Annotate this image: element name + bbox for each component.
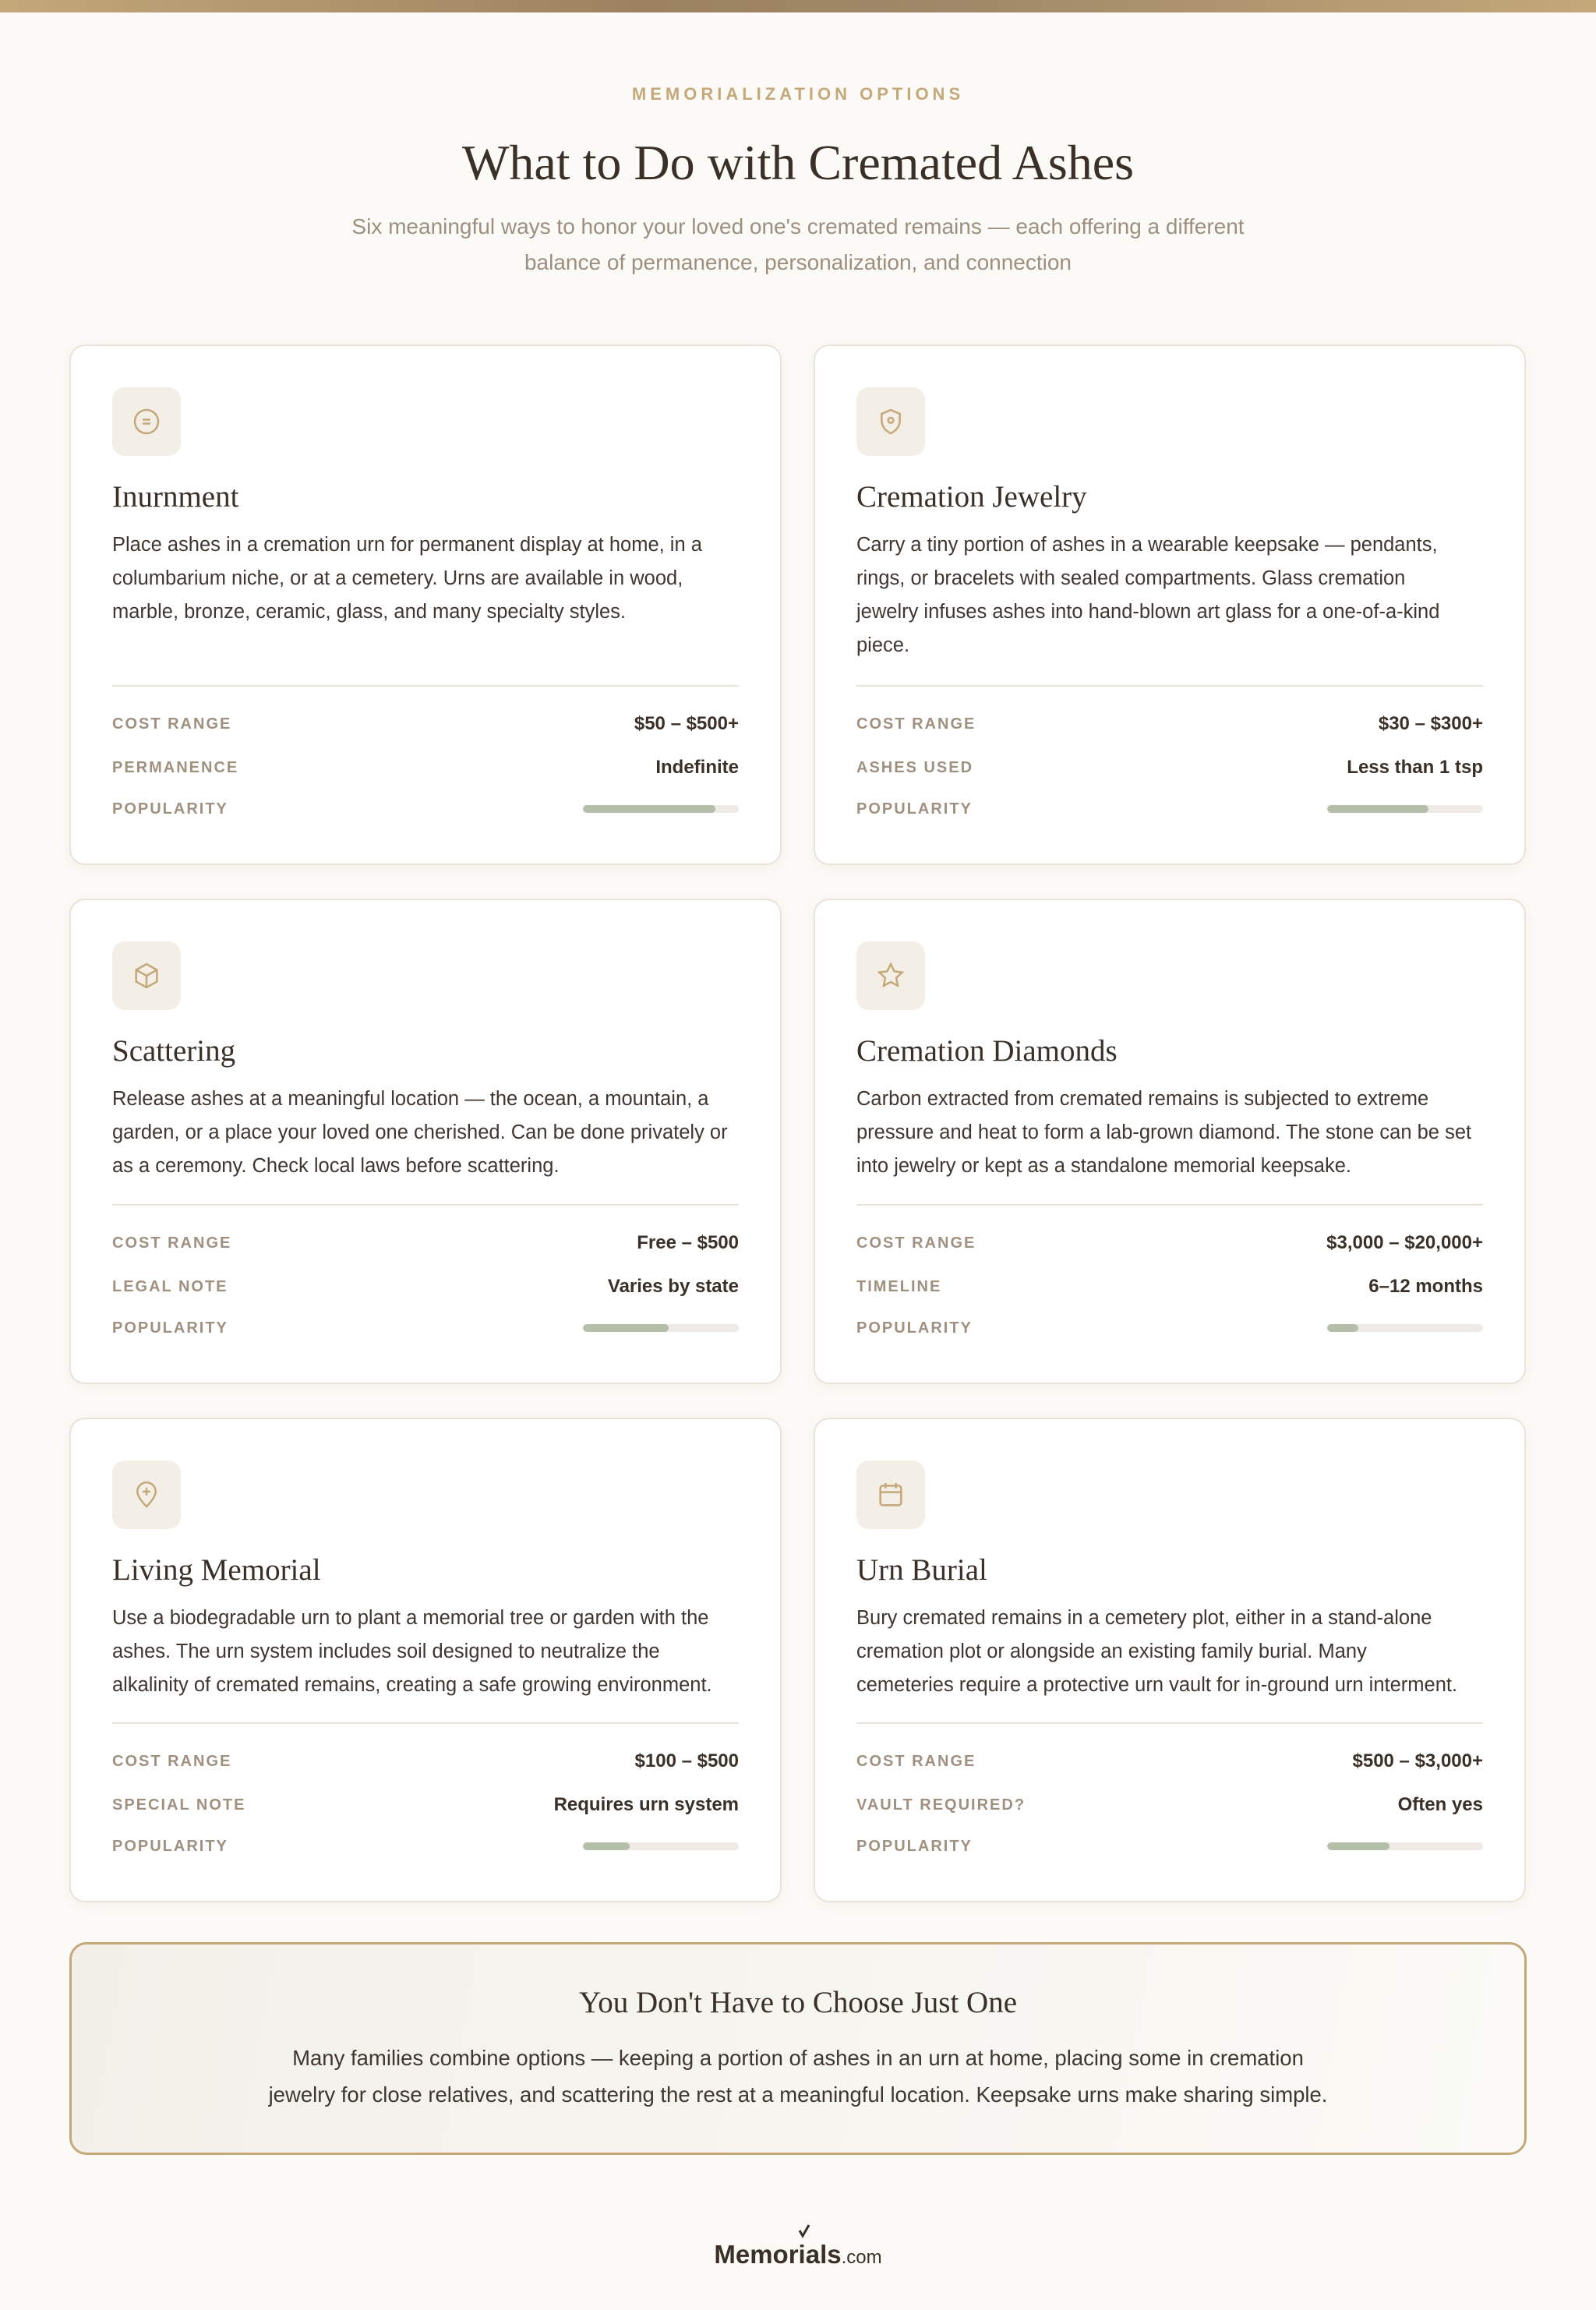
- logo: Memorials.com: [714, 2240, 882, 2269]
- stats: Often yes: [1398, 1794, 1483, 1815]
- stats: LEGAL NOTE: [112, 1278, 228, 1295]
- description: piece.: [856, 634, 909, 656]
- icon: star: [856, 941, 925, 1010]
- description: as a ceremony. Check local laws before scattering.: [112, 1155, 560, 1177]
- description: Carry a tiny portion of ashes in a wearable keepsake — pendants,: [856, 534, 1438, 556]
- heading: Urn Burial: [856, 1553, 987, 1587]
- icon: urn circle: [112, 387, 181, 456]
- description: pressure and heat to form a lab-grown diamond. The stone can be set: [856, 1121, 1471, 1143]
- description: cremation plot or alongside an existing family burial. Many: [856, 1641, 1367, 1662]
- subtitle: [351, 214, 1245, 274]
- logo: [714, 2224, 882, 2269]
- stats: [856, 685, 1483, 864]
- icon: map pin plus: [112, 1461, 181, 1529]
- panel: Urn Burial: [814, 1418, 1526, 1902]
- stats: 6–12 months: [1368, 1276, 1483, 1297]
- stats: [856, 1722, 1483, 1901]
- callout text: [268, 2046, 1327, 2107]
- description: [856, 1088, 1471, 1177]
- description: [112, 534, 702, 623]
- stats: [112, 1204, 739, 1383]
- stats: COST RANGE: [112, 1752, 231, 1769]
- description: Carbon extracted from cremated remains is subjected to extreme: [856, 1088, 1428, 1110]
- description: into jewelry or kept as a standalone memorial keepsake.: [856, 1155, 1351, 1177]
- stats: COST RANGE: [856, 1752, 976, 1769]
- description: ashes. The urn system includes soil designed to neutralize the: [112, 1641, 660, 1662]
- stats: $3,000 – $20,000+: [1326, 1232, 1483, 1253]
- description: [856, 534, 1439, 656]
- description: rings, or bracelets with sealed compartments. Glass cremation: [856, 567, 1405, 589]
- heading: Cremation Jewelry: [856, 480, 1087, 514]
- stats: POPULARITY: [112, 1838, 228, 1855]
- stats: [856, 1204, 1483, 1383]
- panel: Scattering: [69, 899, 782, 1384]
- stats: Requires urn system: [554, 1794, 739, 1815]
- stats: POPULARITY: [856, 1319, 973, 1336]
- stats: Free – $500: [637, 1232, 739, 1253]
- stats: Varies by state: [608, 1276, 739, 1297]
- description: [112, 1088, 728, 1177]
- stats: $50 – $500+: [634, 713, 739, 734]
- stats: ASHES USED: [856, 759, 973, 776]
- callout: [69, 1942, 1527, 2155]
- description: Release ashes at a meaningful location — the ocean, a mountain, a: [112, 1088, 709, 1110]
- subtitle: Six meaningful ways to honor your loved one's cremated remains — each offering a different: [351, 214, 1245, 238]
- stats: COST RANGE: [112, 1234, 231, 1252]
- stats: COST RANGE: [856, 715, 976, 733]
- description: Place ashes in a cremation urn for permanent display at home, in a: [112, 534, 702, 556]
- stats: SPECIAL NOTE: [112, 1796, 245, 1813]
- heading: Inurnment: [112, 480, 238, 514]
- stats: Indefinite: [655, 757, 739, 778]
- stats: VAULT REQUIRED?: [856, 1796, 1026, 1813]
- title: What to Do with Cremated Ashes: [462, 135, 1134, 190]
- heading: Living Memorial: [112, 1553, 321, 1587]
- description: Bury cremated remains in a cemetery plot, either in a stand-alone: [856, 1607, 1432, 1629]
- stats: POPULARITY: [856, 1838, 973, 1855]
- stats: POPULARITY: [112, 1319, 228, 1336]
- stats: $100 – $500: [635, 1750, 739, 1771]
- stats: TIMELINE: [856, 1278, 941, 1295]
- panel: Living Memorial: [69, 1418, 782, 1902]
- heading: Cremation Diamonds: [856, 1034, 1118, 1068]
- stats: COST RANGE: [856, 1234, 976, 1252]
- subtitle: balance of permanence, personalization, and connection: [524, 250, 1072, 274]
- stats: [112, 685, 739, 864]
- description: [856, 1607, 1457, 1696]
- description: [112, 1607, 712, 1696]
- description: columbarium niche, or at a cemetery. Urns are available in wood,: [112, 567, 683, 589]
- stats: $30 – $300+: [1379, 713, 1483, 734]
- description: cemeteries require a protective urn vault for in-ground urn interment.: [856, 1674, 1457, 1696]
- callout text: jewelry for close relatives, and scattering the rest at a meaningful location. Keepsake urns make sharing simple.: [269, 2082, 1327, 2107]
- panel: Inurnment: [69, 344, 782, 865]
- stats: POPULARITY: [856, 800, 973, 817]
- stats: COST RANGE: [112, 715, 231, 733]
- stats: Less than 1 tsp: [1347, 757, 1483, 778]
- panel: Cremation Jewelry: [814, 344, 1526, 865]
- description: alkalinity of cremated remains, creating a safe growing environment.: [112, 1674, 712, 1696]
- callout text: Many families combine options — keeping a portion of ashes in an urn at home, placing some in cremation: [292, 2046, 1304, 2070]
- callout heading: You Don't Have to Choose Just One: [579, 1986, 1017, 2019]
- stats: POPULARITY: [112, 800, 228, 817]
- eyebrow: MEMORIALIZATION OPTIONS: [632, 84, 964, 104]
- description: jewelry infuses ashes into hand-blown art glass for a one-of-a-kind: [856, 601, 1439, 623]
- stats: PERMANENCE: [112, 759, 238, 776]
- description: garden, or a place your loved one cherished. Can be done privately or: [112, 1121, 728, 1143]
- icon: shield: [856, 387, 925, 456]
- panel: Cremation Diamonds: [814, 899, 1526, 1384]
- stats: [112, 1722, 739, 1901]
- icon: cube: [112, 941, 181, 1010]
- heading: Scattering: [112, 1034, 235, 1068]
- stats: $500 – $3,000+: [1353, 1750, 1483, 1771]
- description: marble, bronze, ceramic, glass, and many specialty styles.: [112, 601, 626, 623]
- description: Use a biodegradable urn to plant a memorial tree or garden with the: [112, 1607, 708, 1629]
- icon: calendar: [856, 1461, 925, 1529]
